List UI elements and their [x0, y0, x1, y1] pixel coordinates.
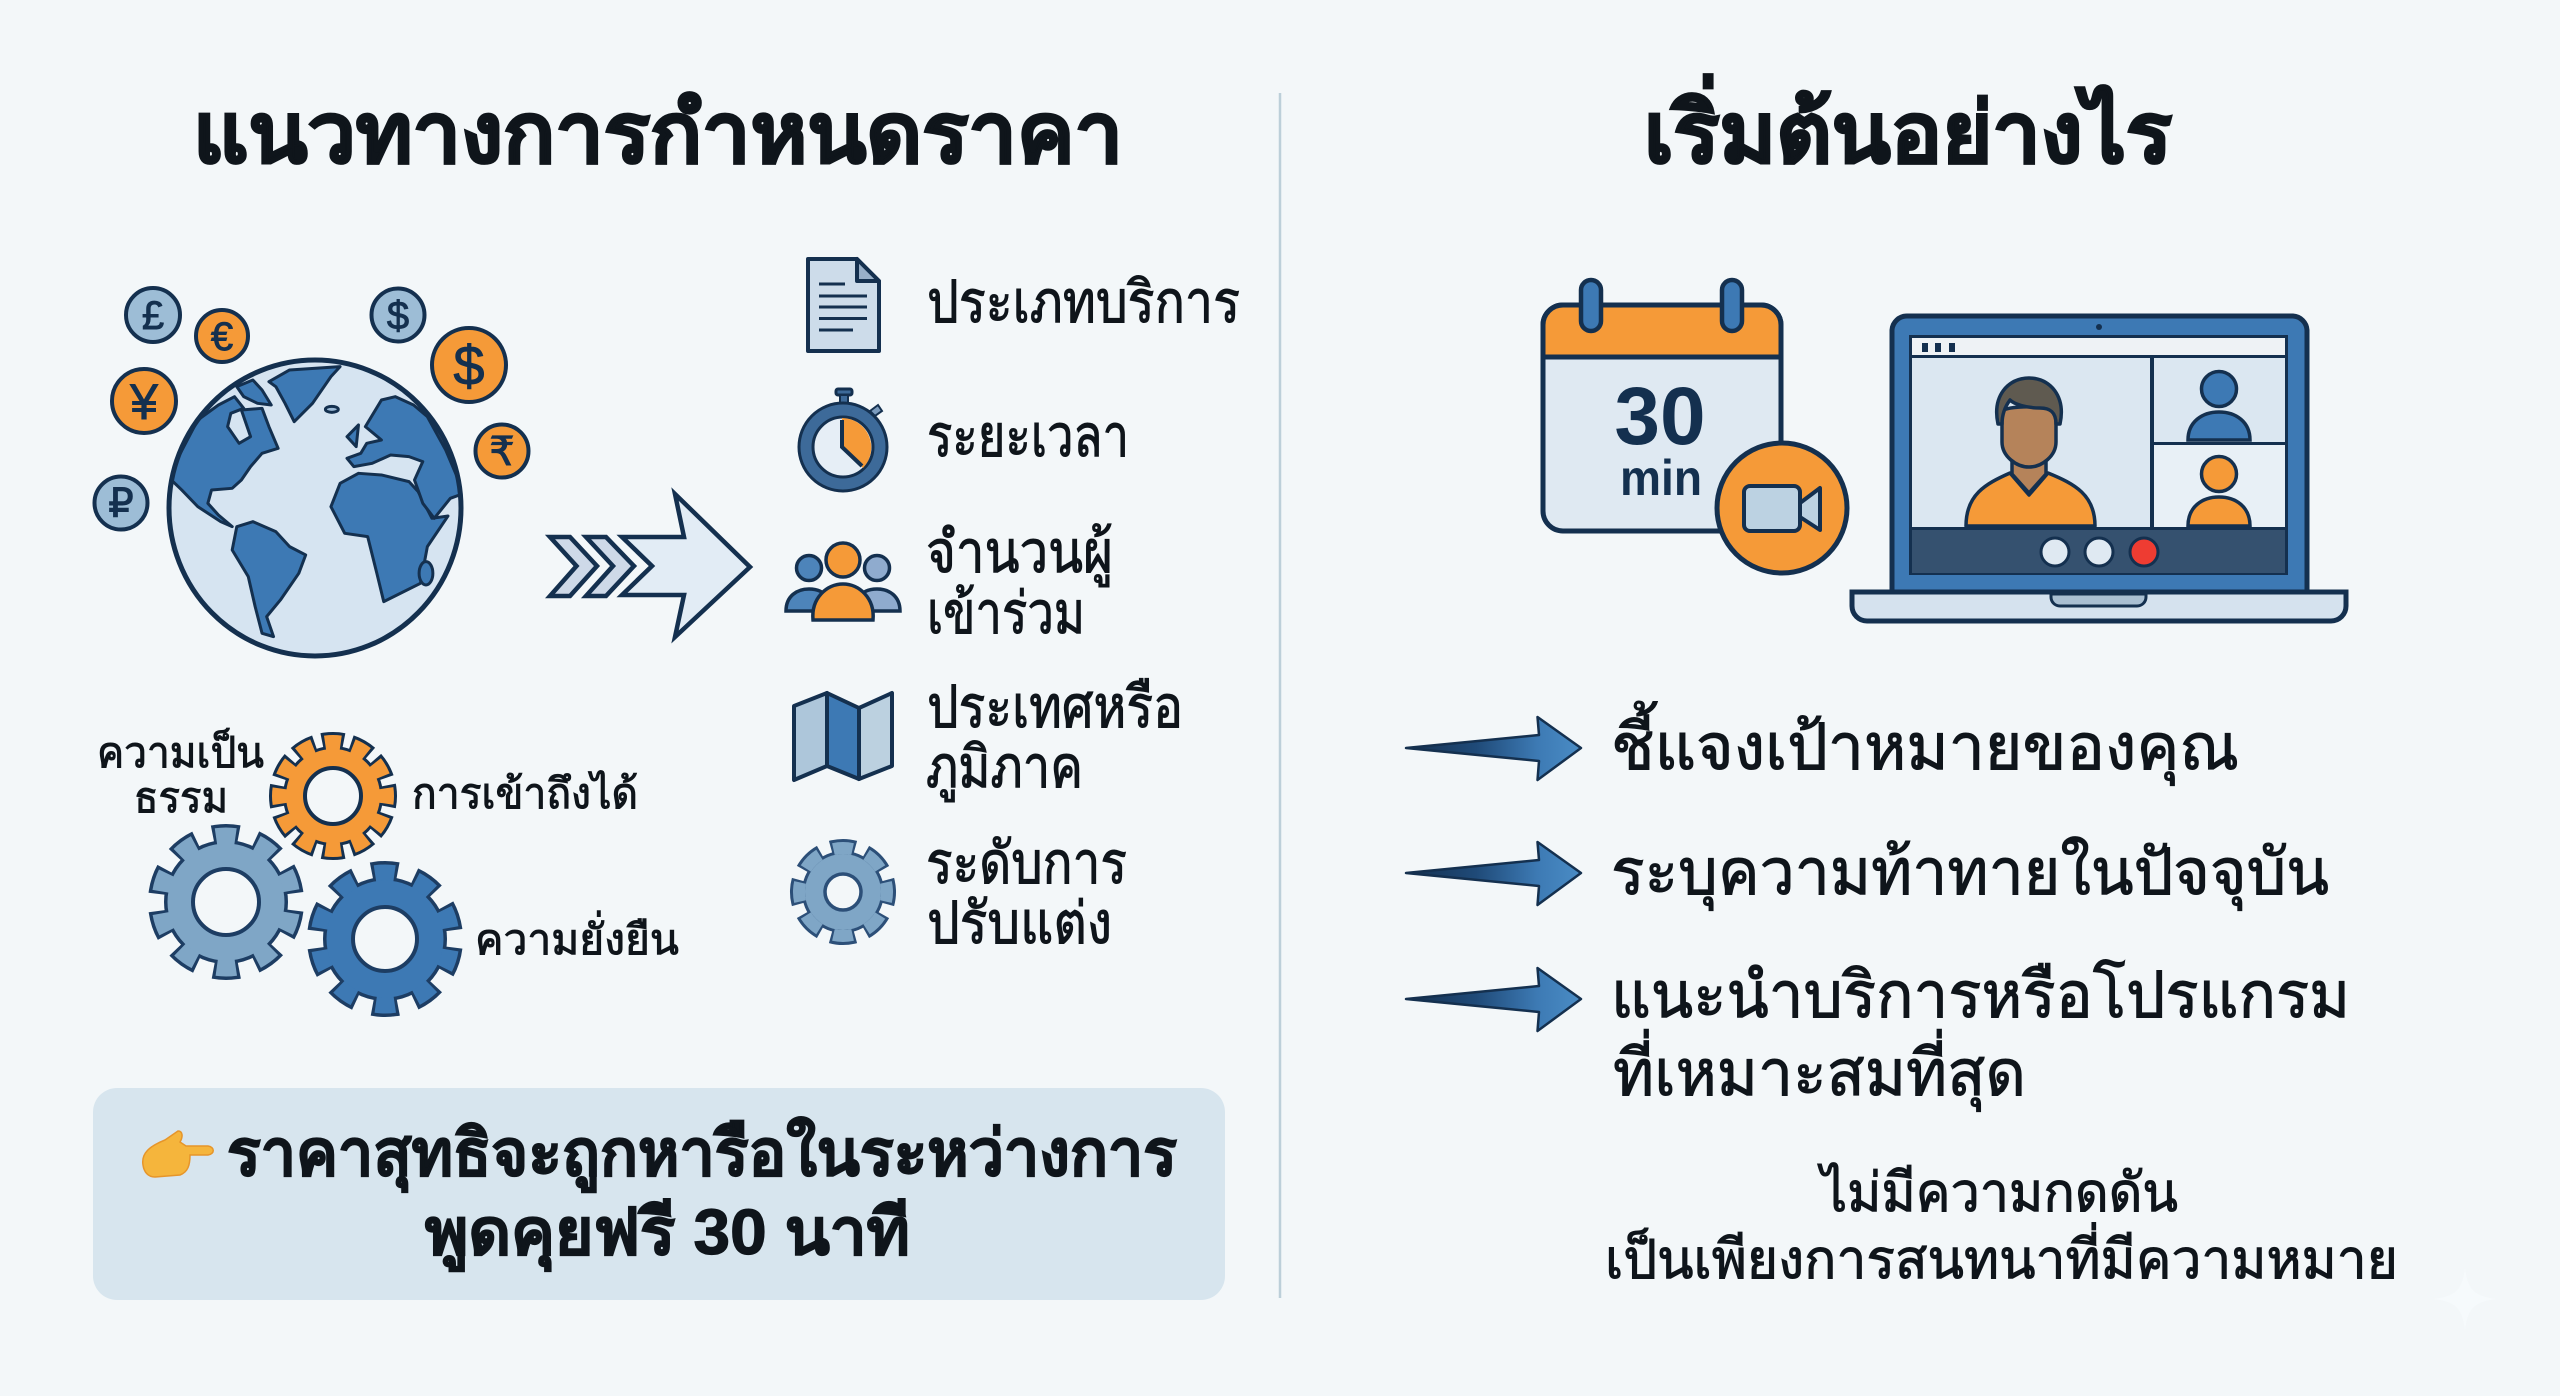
coin: yen: ¥	[129, 374, 158, 430]
coin: ruble: ₽	[108, 482, 134, 526]
arrow: chevrons into block arrow	[550, 494, 750, 637]
participant blue	[2188, 372, 2250, 440]
icon group: three gears	[149, 734, 462, 1016]
label: service type: ประเภทบริการ	[927, 270, 1240, 335]
closing note	[1605, 1162, 2398, 1290]
closing note: ไม่มีความกดดัน	[1817, 1162, 2178, 1223]
step 3: ที่เหมาะสมที่สุด	[1613, 1029, 2026, 1112]
label: customization level: ปรับแต่ง	[927, 891, 1112, 956]
participant orange	[2188, 456, 2250, 526]
label: customization level	[926, 831, 1127, 956]
step 1: ชี้แจงเป้าหมายของคุณ	[1611, 701, 2239, 786]
label: number of participants: จำนวนผู้	[926, 520, 1113, 587]
gear: light blue	[149, 825, 303, 979]
arrow	[1406, 842, 1581, 905]
heading: how to start: เริ่มต้นอย่างไร	[1644, 74, 2172, 180]
step 2: ระบุความท้าทายในปัจจุบัน	[1611, 836, 2329, 911]
panel: pricing approach	[93, 86, 1240, 1300]
label: accessibility: การเข้าถึงได้	[412, 770, 638, 817]
gear: orange	[271, 734, 395, 858]
step 3	[1406, 959, 2350, 1112]
coin: large dollar	[432, 328, 506, 402]
main participant	[1966, 378, 2095, 526]
coin: ruble	[94, 476, 148, 530]
arrow	[1406, 968, 1581, 1031]
label: customization level: ระดับการ	[926, 831, 1127, 896]
coin: small dollar: $	[387, 294, 409, 338]
label: number of participants: เข้าร่วม	[927, 581, 1085, 646]
coin: euro: €	[211, 315, 233, 359]
heading: pricing approach: แนวทางการกำหนดราคา	[193, 86, 1123, 180]
closing note: เป็นเพียงการสนทนาที่มีความหมาย	[1605, 1222, 2398, 1290]
icon: calendar 30 min: min	[1620, 450, 1702, 506]
icon: document	[808, 259, 879, 351]
label: fairness: ความเป็น	[97, 728, 264, 776]
icon: video camera badge	[1717, 443, 1847, 573]
label: country or region: ภูมิภาค	[926, 735, 1083, 802]
step 1	[1406, 701, 2239, 786]
coin: yen	[112, 369, 176, 433]
callout: net price discussed on free call: พูดคุยฟรี 30 นาที	[425, 1196, 910, 1272]
coin: rupee	[476, 424, 528, 478]
icon: folded map	[794, 693, 892, 780]
icon: calendar 30 min	[1543, 280, 1847, 573]
arrow	[1406, 717, 1581, 780]
icon: calendar 30 min: 30	[1614, 371, 1706, 462]
icon: participants	[786, 543, 900, 620]
globe	[168, 360, 464, 656]
coin: small dollar	[372, 288, 424, 342]
icon: settings gear	[789, 838, 897, 946]
icon: laptop video call	[1852, 316, 2346, 621]
call controls	[2041, 538, 2158, 566]
label: country or region	[926, 675, 1183, 802]
panel: how to start	[1406, 74, 2398, 1290]
coin: rupee: ₹	[489, 430, 515, 474]
coin: large dollar: $	[453, 334, 485, 397]
icon: stopwatch	[799, 389, 887, 491]
label: fairness	[97, 728, 264, 821]
step 3: แนะนำบริการหรือโปรแกรม	[1611, 959, 2350, 1031]
callout: net price discussed on free call	[93, 1088, 1225, 1300]
coin: euro	[196, 310, 248, 362]
label: country or region: ประเทศหรือ	[927, 675, 1183, 740]
coin: pound: £	[142, 294, 164, 338]
label: duration: ระยะเวลา	[927, 404, 1129, 469]
gear: blue	[308, 862, 462, 1016]
callout: net price discussed on free call: ราคาสุทธิจะถูกหารือในระหว่างการ	[227, 1116, 1177, 1193]
coin: pound	[126, 288, 180, 342]
label: sustainability: ความยั่งยืน	[475, 911, 679, 963]
label: fairness: ธรรม	[134, 774, 228, 821]
icon: pointing hand	[143, 1131, 213, 1177]
icon: globe with currency coins	[94, 288, 528, 656]
label: number of participants	[926, 520, 1113, 646]
